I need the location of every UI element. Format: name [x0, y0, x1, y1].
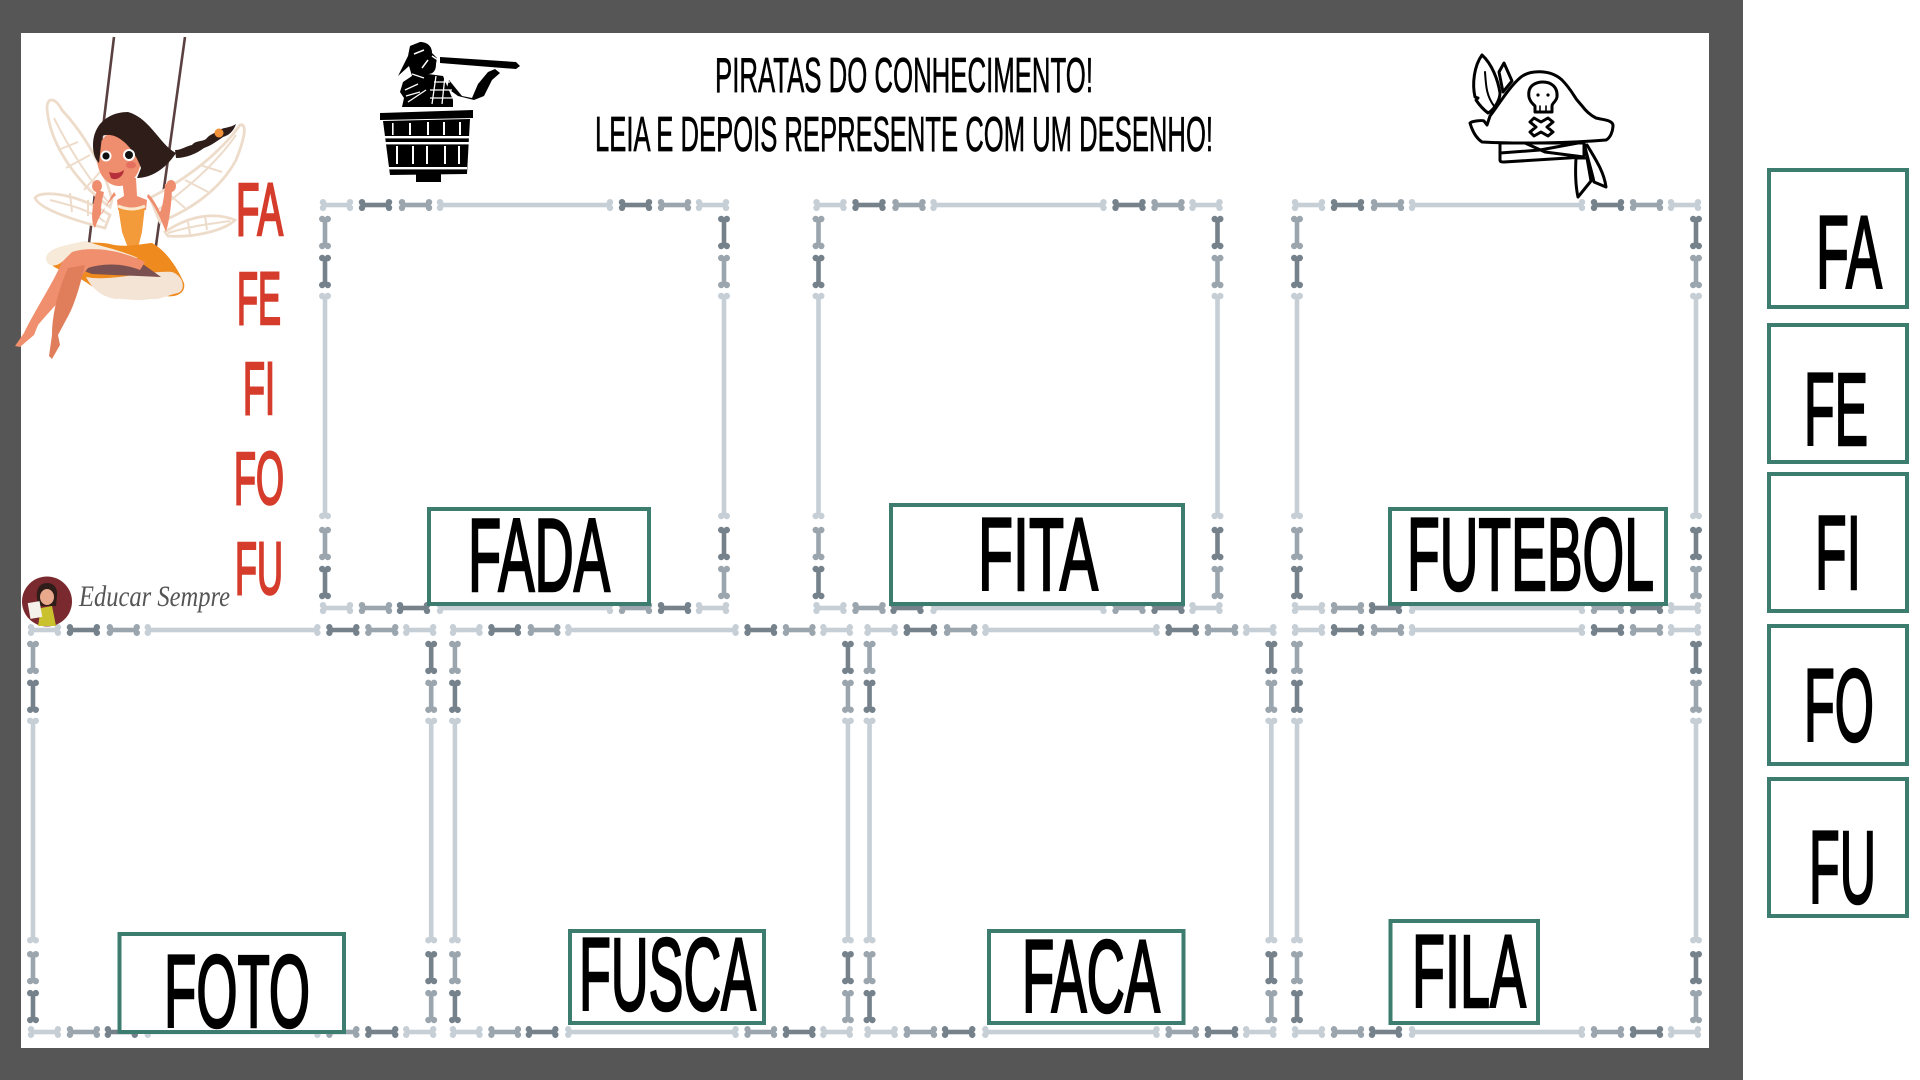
word label FILA: [1390, 914, 1538, 1029]
title: PIRATAS DO CONHECIMENTO!: [715, 49, 1093, 103]
word label FOTO: FOTO: [164, 934, 310, 1049]
icon: pirate hat with feather and skull: [1470, 55, 1613, 197]
text: FU: [235, 527, 283, 610]
word label FITA: [891, 497, 1183, 612]
syllable list: red letters: FA: [236, 168, 283, 251]
logo: Educar Sempre: Educar Sempre: [78, 580, 230, 613]
word label FACA: FACA: [1022, 919, 1160, 1034]
panel: drawing frame FUTEBOL: [1291, 199, 1702, 614]
side card FE: [1769, 325, 1907, 467]
word label FUSCA: [570, 917, 764, 1032]
side card FI: [1769, 474, 1907, 612]
icon: fairy on a swing: [15, 37, 244, 359]
word label FADA: FADA: [468, 498, 610, 614]
panel: drawing frame FACA: [863, 624, 1277, 1038]
panel: drawing frame FITA: [812, 199, 1224, 614]
syllable list: red letters: FI: [243, 347, 275, 430]
syllable list: red letters: [234, 168, 284, 610]
side card FO: [1769, 626, 1907, 764]
logo: Educar Sempre: [22, 576, 230, 626]
text: FE: [237, 257, 281, 340]
panel: drawing frame FOTO: [27, 624, 437, 1038]
word label FUTEBOL: [1390, 497, 1666, 612]
word label FITA: FITA: [978, 497, 1098, 612]
panel: drawing frame FUSCA: [449, 624, 854, 1038]
panel: drawing frame FADA: [319, 199, 730, 614]
title: LEIA E DEPOIS REPRESENTE COM UM DESENHO!: [595, 108, 1213, 162]
panel: drawing frame FILA: [1291, 624, 1702, 1038]
side card FA: [1769, 170, 1907, 310]
icon: pirate with spyglass in crow's nest: [380, 42, 520, 182]
side card FI: FI: [1815, 495, 1861, 612]
word label FUTEBOL: FUTEBOL: [1407, 497, 1654, 612]
word label FACA: [989, 919, 1184, 1034]
word label FOTO: [120, 934, 344, 1049]
word label FUSCA: FUSCA: [579, 917, 756, 1032]
word label FADA: [429, 498, 649, 614]
title: [595, 49, 1213, 162]
word label FILA: FILA: [1412, 914, 1526, 1029]
side card FU: [1769, 779, 1907, 925]
text: FO: [234, 437, 284, 520]
